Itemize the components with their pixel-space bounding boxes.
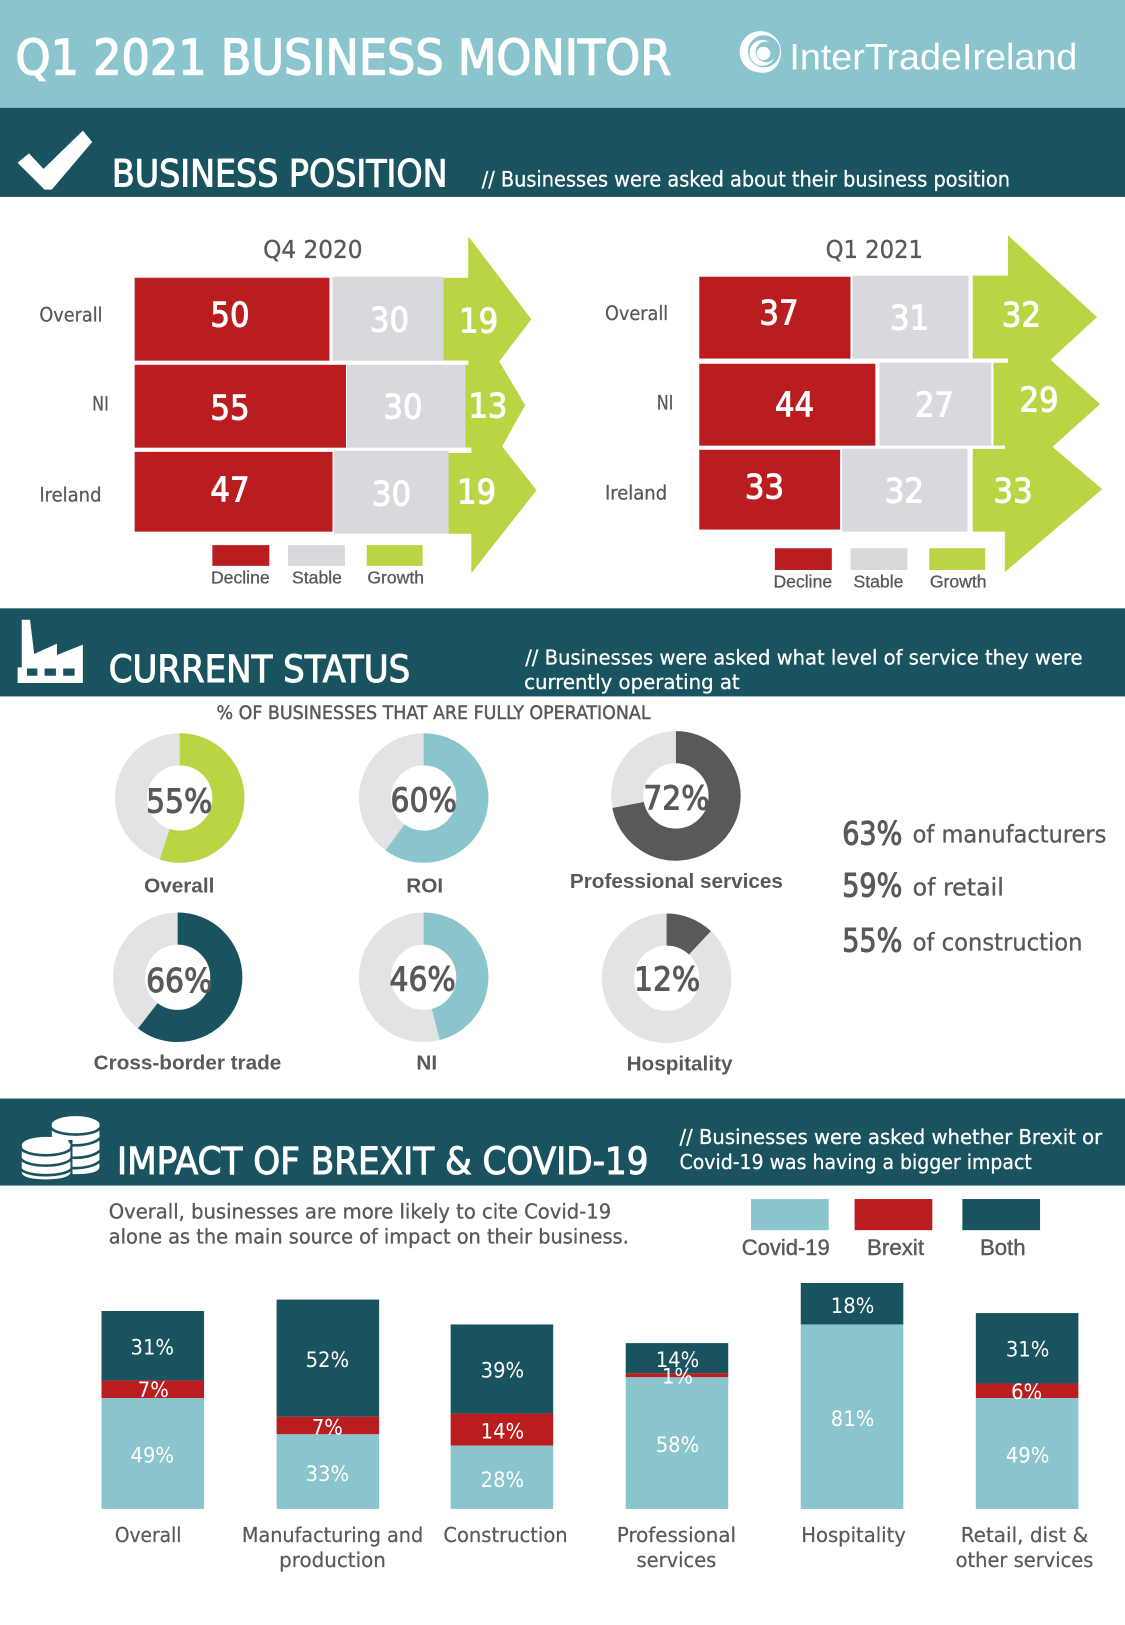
bar: Professional services: Professional xyxy=(617,1523,736,1547)
row: Ireland: 47 xyxy=(210,471,250,511)
bar: Overall: 7% xyxy=(138,1378,169,1403)
row: NI: NI xyxy=(657,391,673,414)
row: Ireland xyxy=(39,451,496,534)
row: Ireland: Ireland xyxy=(605,482,667,505)
legend: impact: Both xyxy=(980,1235,1026,1260)
bar: Professional services: 1% xyxy=(662,1365,693,1390)
heading: impact: IMPACT OF BREXIT & COVID-19 xyxy=(117,1139,648,1183)
bar: Overall: Overall xyxy=(115,1523,181,1547)
note: impact: // Businesses were asked whether Brexit or xyxy=(680,1125,1103,1149)
row: NI: 13 xyxy=(468,387,507,427)
legend: impact xyxy=(742,1199,1040,1260)
bar: Retail, dist and other services: Retail, dist & xyxy=(961,1523,1088,1547)
legend: impact: Brexit xyxy=(867,1235,924,1260)
row: Ireland: 33 xyxy=(745,467,784,507)
bar: Manufacturing and production: Manufacturing and xyxy=(242,1523,423,1547)
row: Overall: 50 xyxy=(210,295,250,335)
row: Ireland: Ireland xyxy=(39,484,102,507)
donut: NI 46% xyxy=(375,929,472,1075)
summary text xyxy=(109,1200,629,1249)
row: NI: 29 xyxy=(1019,380,1059,420)
row: Overall: 19 xyxy=(459,302,498,342)
chart title: Q4 2020 xyxy=(263,235,363,264)
bar: Hospitality xyxy=(801,1283,906,1547)
row: NI: 55 xyxy=(210,389,250,429)
donut: Overall 55%: Overall xyxy=(144,874,214,897)
legend: Stable xyxy=(292,567,342,587)
donut: Overall 55%: 55% xyxy=(146,781,212,821)
bar: Manufacturing and production: 52% xyxy=(306,1348,349,1373)
heading: business position: BUSINESS POSITION xyxy=(112,152,448,196)
bar: Hospitality: Hospitality xyxy=(801,1523,906,1547)
donut: ROI 60% xyxy=(375,749,472,897)
row: Overall: Overall xyxy=(605,302,668,325)
bar: Manufacturing and production: 7% xyxy=(312,1415,343,1440)
icon: factory xyxy=(18,620,83,683)
row: Overall: 37 xyxy=(759,293,799,333)
note: current status xyxy=(524,645,1083,694)
stat: retail: of retail xyxy=(913,873,1004,901)
legend: Decline xyxy=(773,572,832,592)
row: Overall: 30 xyxy=(370,301,409,341)
growth arrows xyxy=(443,236,537,573)
bar: Professional services xyxy=(617,1343,736,1572)
donut: NI 46%: NI xyxy=(416,1052,437,1075)
row: Overall: Overall xyxy=(39,303,103,326)
donut: Overall 55% xyxy=(131,749,228,897)
legend xyxy=(773,548,987,592)
donut: Professional services 72%: Professional services xyxy=(570,870,783,893)
bar: Retail, dist and other services: 6% xyxy=(1011,1380,1042,1405)
row: Ireland: 33 xyxy=(994,472,1033,512)
bar: Hospitality: 18% xyxy=(831,1294,874,1319)
header banner xyxy=(0,0,1125,108)
row: Overall: 31 xyxy=(890,299,929,339)
bar: Construction: Construction xyxy=(443,1523,568,1547)
stacked bar chart xyxy=(102,1283,1093,1572)
bar: Construction: 14% xyxy=(481,1419,524,1444)
note: current status: currently operating at xyxy=(524,670,740,694)
row: Ireland: 19 xyxy=(457,473,496,513)
chart title: Q1 2021 xyxy=(826,235,923,264)
row: NI: 30 xyxy=(383,388,423,428)
legend: Growth xyxy=(367,567,424,587)
donut: Cross-border trade 66%: 66% xyxy=(146,961,212,1000)
icon: coin stacks xyxy=(21,1116,100,1179)
legend: impact: Covid-19 xyxy=(742,1235,830,1260)
bar: Construction: 39% xyxy=(481,1358,524,1383)
row: NI: 44 xyxy=(775,386,814,426)
heading: current status: CURRENT STATUS xyxy=(109,647,410,691)
donut: Hospitality 12%: 12% xyxy=(634,960,700,999)
row: Overall: 32 xyxy=(1002,295,1041,335)
donut: Cross-border trade 66%: Cross-border trade xyxy=(94,1052,281,1075)
row: NI: 27 xyxy=(915,386,954,426)
stat: construction: 55% xyxy=(842,921,902,959)
growth arrows xyxy=(973,235,1102,572)
bar: Professional services: 58% xyxy=(656,1433,699,1458)
summary text: alone as the main source of impact on their business. xyxy=(109,1225,629,1249)
legend: Growth xyxy=(930,572,987,592)
row: Ireland: 32 xyxy=(885,472,924,512)
bar: Retail, dist and other services: 31% xyxy=(1006,1338,1049,1363)
stat: manufacturers xyxy=(842,815,1106,853)
stat: retail xyxy=(842,866,1004,904)
donut: Cross-border trade 66% xyxy=(94,929,281,1075)
donut: Professional services 72%: 72% xyxy=(643,778,710,817)
note: impact xyxy=(680,1125,1103,1174)
bar: Professional services: 14% xyxy=(656,1348,699,1373)
row: Ireland: 30 xyxy=(372,475,411,515)
donut: Professional services 72% xyxy=(570,747,783,893)
row: NI: NI xyxy=(92,392,109,415)
donut: Hospitality 12%: Hospitality xyxy=(627,1053,733,1076)
icon: check mark xyxy=(18,131,92,190)
bar: Manufacturing and production xyxy=(242,1300,423,1572)
stat: manufacturers: 63% xyxy=(842,815,902,853)
bar: Retail, dist and other services xyxy=(956,1313,1093,1572)
bar: Overall xyxy=(102,1311,204,1547)
stat: retail: 59% xyxy=(842,866,902,904)
title: Q1 2021 BUSINESS MONITOR xyxy=(16,31,671,87)
bar: Hospitality: 81% xyxy=(831,1407,874,1432)
note: current status: // Businesses were asked what level of service they were xyxy=(525,645,1083,669)
bar: Overall: 49% xyxy=(131,1443,174,1468)
stat: manufacturers: of manufacturers xyxy=(913,821,1106,849)
summary text: Overall, businesses are more likely to cite Covid-19 xyxy=(109,1200,611,1224)
donut: ROI 60%: ROI xyxy=(406,874,443,897)
row: Ireland xyxy=(605,449,1033,532)
bar: Retail, dist and other services: other services xyxy=(956,1548,1093,1572)
row: Overall xyxy=(39,277,498,361)
stats list xyxy=(842,815,1106,959)
bar: Manufacturing and production: 33% xyxy=(306,1462,349,1487)
chart: Q4 2020 xyxy=(39,235,537,587)
donut: ROI 60%: 60% xyxy=(391,780,457,819)
legend: Stable xyxy=(853,572,904,592)
donut: NI 46%: 46% xyxy=(390,960,456,999)
stat: construction xyxy=(842,921,1083,959)
note: impact: Covid-19 was having a bigger impact xyxy=(680,1150,1032,1174)
bar: Professional services: services xyxy=(637,1548,716,1572)
bar: Retail, dist and other services: 49% xyxy=(1006,1443,1049,1468)
bar: Manufacturing and production: production xyxy=(279,1548,386,1572)
chart: Q1 2021 xyxy=(605,235,1102,592)
donut: Hospitality 12% xyxy=(618,930,733,1076)
row: NI xyxy=(657,363,1059,446)
legend: Decline xyxy=(211,567,270,587)
note: business position: // Businesses were asked about their business position xyxy=(482,168,1010,193)
logo: InterTradeIreland: InterTradeIreland xyxy=(789,35,1077,77)
row: NI xyxy=(92,365,507,448)
section band: current status xyxy=(0,608,1125,696)
bar: Construction xyxy=(443,1324,568,1547)
stat: construction: of construction xyxy=(913,928,1083,956)
bar: Construction: 28% xyxy=(481,1468,524,1493)
bar: Overall: 31% xyxy=(131,1336,174,1361)
section band: impact of Brexit and Covid-19 xyxy=(0,1099,1125,1186)
section band: business position xyxy=(0,108,1125,197)
subheading: fully operational: % OF BUSINESSES THAT ARE FULLY OPERATIONAL xyxy=(217,703,651,724)
row: Overall xyxy=(605,276,1041,359)
legend xyxy=(211,545,424,587)
